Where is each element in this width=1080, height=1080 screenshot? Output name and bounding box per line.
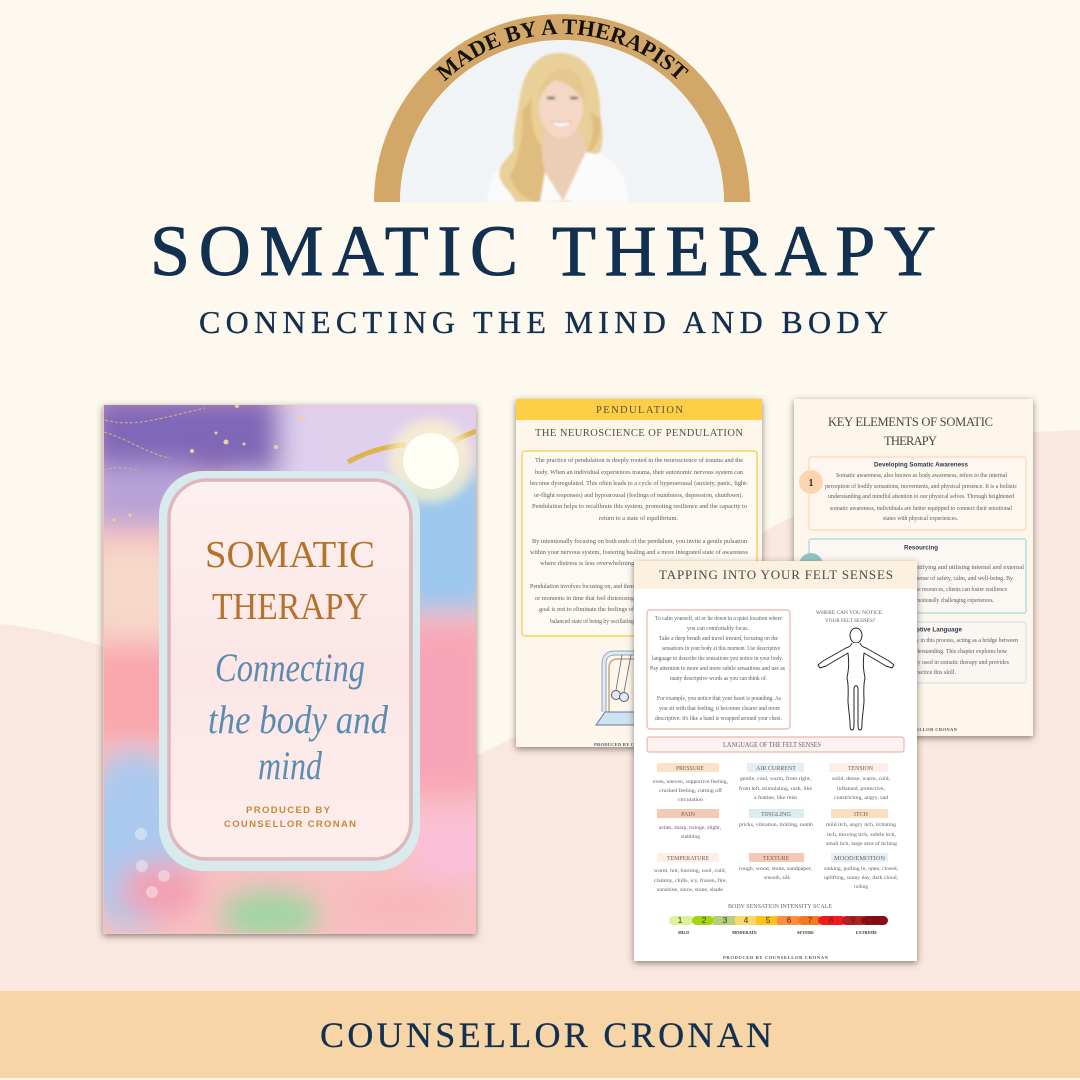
pendulation text: Pendulation helps to recalibrate this system, promoting resilience and the capacity to [532,503,747,510]
intensity scale bar [669,915,888,925]
instructions box: you can comfortably focus. [687,625,749,632]
element 1 [799,457,1026,530]
element 2: motionally challenging experiences. [916,597,994,604]
felt sense: temperature: clammy, chills, icy, frozen, fire, [654,877,728,884]
pendulation text: where distress is less overwhelming, [540,560,636,567]
pendulation text: body. When an individual experiences trauma, their autonomic nervous system can [535,469,744,476]
body prompt [816,610,882,624]
sun [389,419,473,503]
felt sense: pain [657,809,722,840]
felt sense: tension: solid, dense, warm, cold, [832,776,891,782]
intensity scale bar: 8 [829,915,834,925]
intensity scale labels: MODERATE [732,930,757,935]
page heading: THE NEUROSCIENCE OF PENDULATION [535,428,743,439]
felt sense: air current: AIR CURRENT [756,765,796,772]
felt sense: air current: from left, stimulating, rush, like [739,785,812,792]
cover script subtitle: Connecting [215,645,365,690]
element 3 [809,622,1026,683]
felt sense: itch [826,809,897,847]
body prompt: YOUR FELT SESNES? [825,618,875,624]
element 2: se resources, clients can foster resilience [916,586,1007,593]
element 1: Somatic awareness, also known as body awareness, refers to the internal [836,472,1007,479]
instructions box: Pay attention to more and more subtle sensations and use as [650,665,785,672]
felt sense: air current: a feather, like mist [754,794,797,801]
page footer: ELLOR CRONAN [916,727,958,732]
icon: body outline [818,628,894,730]
felt sense: texture [739,853,813,881]
felt sense: temperature: warm, hot, burning, cool, cold, [654,868,727,874]
page background [634,561,917,961]
element 3: derstanding. This chapter explores how [916,648,1007,655]
page footer: PRODUCED BY COUNSELLOR CRONAN [723,955,829,960]
instructions box [647,610,790,729]
felt sense: mood: uplifting, sunny day, dark cloud, [824,874,899,881]
element 3: ly used in somatic therapy and provides [916,659,1010,666]
felt sense: air current: gentle, cool, warm, from right, [740,775,812,782]
intensity scale bar: 1 [678,915,683,925]
footer brand name: COUNSELLOR CRONAN [320,1015,772,1055]
page: tapping into your felt senses: TAPPING INTO YOUR FELT SENSES [659,567,893,582]
intensity scale bar: 7 [808,915,813,925]
felt sense: itch: small itch, large area of itching [826,840,897,847]
felt sense: pressure: PRESSURE [676,765,704,772]
pendulation text: return to a state of equilibrium. [599,515,678,522]
page: key elements [794,399,1033,736]
page header [634,561,917,589]
instructions box: Take a deep breath and travel inward, focusing on the [659,635,778,642]
pendulation text: balanced state of being by oscillating [550,618,635,625]
element 2: ntifying and utilising internal and external [916,564,1024,571]
cover title: SOMATIC [205,534,375,576]
element 1: understanding and mindful attention to our physical selves. Through heightened [828,493,1015,500]
felt sense: texture: smooth, silk [764,875,790,881]
pendulation text: The practice of pendulation is deeply rooted in the neuroscience of trauma and the [535,457,743,464]
felt sense: mood: MOOD/EMOTION [834,855,885,862]
page footer: PRODUCED BY C [594,742,634,747]
felt sense: itch: mild itch, angry itch, irritating [826,822,896,828]
page background [516,399,762,747]
felt sense: tension: TENSION [848,765,873,772]
bokeh dots [135,828,170,898]
element 3: ractice this skill. [916,669,956,676]
element 3: ptive Language [916,626,962,634]
gold arch [374,14,750,202]
felt sense: pain: PAIN [681,811,695,818]
footer band [0,991,1080,1080]
cover script subtitle [208,645,389,788]
instructions box: many descriptive words as you can think of. [670,675,767,682]
cover producer [224,805,356,830]
instructions box: For example, you notice that your heart is pounding. As [657,695,781,702]
page: pendulation [516,399,762,747]
intensity scale bar: 2 [702,915,707,925]
arch text: MADE BY A THERAPIST [435,19,689,82]
instructions box: sensations in your body at this moment. Use descriptive [662,645,780,652]
felt sense: texture: rough, wood, stone, sandpaper, [739,866,813,872]
pendulation text: By intentionally focusing on both ends of the pendulum, you invite a gentle pulsation [532,538,748,545]
element 1: Developing Somatic Awareness [874,462,968,468]
element 1: perception of bodily sensations, movements, and physical presence. It is a holistic [825,483,1017,490]
felt sense: temperature: TEMPERATURE [667,855,709,862]
element 1: states with physical experiences. [883,515,958,522]
felt sense: texture: TEXTURE [763,855,789,862]
page: pendulation: PENDULATION [596,405,683,416]
pendulation text: goal is not to eliminate the feelings of [539,606,635,613]
language heading bar [647,737,904,752]
icon: pendulum [596,653,640,725]
page heading: KEY ELEMENTS OF SOMATIC [828,415,993,429]
felt sense: tension: constricting, angry, sad [834,795,888,801]
element 3: y in this process, acting as a bridge between [916,637,1018,644]
pendulation text: within your nervous system, fostering healing and a more integrated state of awareness [530,549,748,556]
gold streaks [348,431,476,462]
cover producer: COUNSELLOR CRONAN [224,819,356,830]
pendulation text [530,457,748,625]
language heading bar: LANGUAGE OF THE FELT SENSES [723,741,821,749]
felt sense: pressure: even, uneven, supportive feeling, [653,778,729,785]
felt sense: tingling: TINGLING [761,811,791,818]
intensity scale bar: 9 [851,915,856,925]
intensity scale bar: 6 [787,915,792,925]
felt sense: mood: roiling [854,884,868,890]
intensity scale labels: MILD [678,930,689,935]
subtitle: CONNECTING THE MIND AND BODY [199,304,888,340]
felt sense: mood: sinking, pulling in, open, closed, [824,866,899,872]
page: key elements: THERAPY [884,434,937,448]
instructions box: To calm yourself, sit or lie down in a quiet location where [655,615,782,622]
intensity scale bar: 5 [766,915,771,925]
pendulation text: Pendulation involves focusing on, and then [530,583,635,590]
felt sense: pressure: crushed feeling, cutting off [659,787,722,794]
ebook cover [80,395,490,939]
pendulation text: or-flight responses) and hypoarousal (feelings of numbness, depression, shutdown). [534,492,743,499]
cover script subtitle: mind [258,743,323,788]
background pink wave [0,430,1080,992]
page background [794,399,1033,736]
element 1: somatic awareness, individuals are better equipped to connect their emotional [830,505,1012,512]
felt sense: pressure: circulation [678,797,703,803]
cover producer: PRODUCED BY [246,805,331,816]
sparkles [112,404,302,522]
instructions box: you sit with that feeling, it becomes clearer and more [659,705,780,712]
pendulation text: or moments in time that feel distressing [535,595,635,602]
element 2 [799,539,1026,613]
felt sense: tingling [739,809,813,828]
instructions box: language to describe the sensations you notice in your body. [652,655,783,662]
felt sense: tingling: pricks, vibration, tickling, numb [739,822,813,828]
intensity scale labels [678,930,877,935]
felt sense: tension [829,763,891,801]
body prompt: WHERE CAN YOU NOTICE [816,610,882,616]
cover frame [159,471,420,871]
felt sense: pain: stabbing [681,834,700,840]
intensity scale bar: 3 [723,915,728,925]
felt sense: temperature: sunshine, snow, stone, shade [657,887,723,893]
element 1: 1 [808,478,814,489]
felt sense: mood [824,853,899,890]
intensity scale heading: BODY SENSATION INTENSITY SCALE [728,904,832,910]
felt sense: itch: itch, moving itch, subtle itch, [827,832,897,838]
page header [516,399,762,420]
pendulation text: become dysregulated. This often leads to a cycle of hyperarousal (anxiety, panic, fight- [530,480,748,487]
intensity scale bar: 10 [870,915,880,925]
felt sense: itch: ITCH [854,811,868,818]
intensity scale labels: EXTREME [856,930,877,935]
arch portrait badge [374,14,750,202]
page: tapping into your felt senses [634,561,917,961]
title: SOMATIC THERAPY [150,211,936,291]
felt sense: air current [739,763,812,801]
cover watercolor art [104,405,476,933]
element 2: Resourcing [904,544,938,552]
cover script subtitle: the body and [208,697,389,742]
felt sense: pain: aches, sharp, twinge, slight, [659,825,722,831]
text box [522,451,757,636]
felt sense: pressure [653,763,729,803]
portrait photo [400,30,724,202]
felt sense: tension: inflamed, protective, [837,785,886,792]
element 2: sense of safety, calm, and well-being. By [916,575,1014,582]
intensity scale bar: 4 [744,915,749,925]
ebook cover: THERAPY [212,586,368,628]
instructions box: descriptive: it's like a band is wrapped around your chest. [655,715,782,722]
cover shadow [103,405,476,934]
intensity scale labels: SEVERE [797,930,814,935]
felt sense: temperature [654,853,728,893]
